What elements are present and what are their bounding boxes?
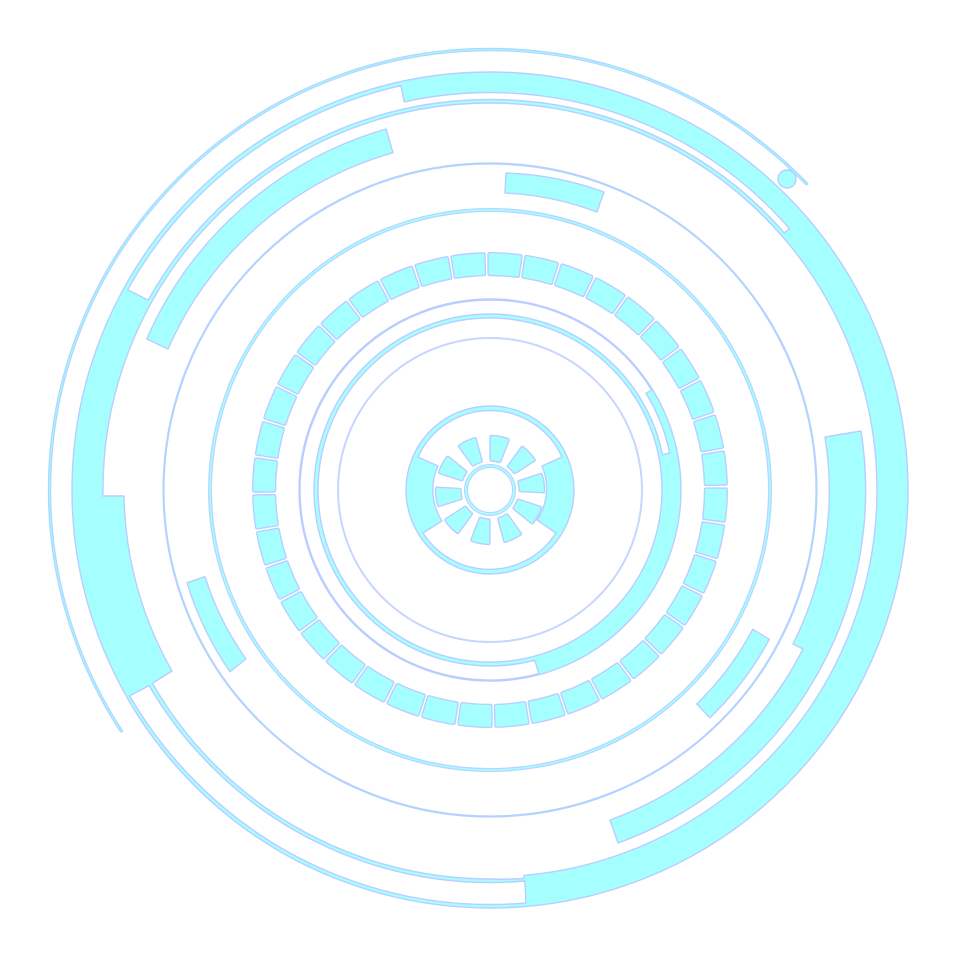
double ring radius 280: [210, 210, 770, 770]
hub segments: [432, 435, 548, 545]
outer thin arc: [50, 50, 806, 731]
thin innermost ring radius 152: [338, 338, 642, 642]
segmented tile ring: [251, 251, 729, 729]
inner ring band with slot: [299, 299, 681, 681]
arc band: lower left short: [187, 577, 246, 672]
thin ring radius 326: [164, 164, 816, 816]
arc band: upper left: [147, 129, 393, 349]
small circle on outer arc: [778, 170, 796, 188]
outer ring band with slots and step: [72, 72, 908, 908]
center double ring: [466, 466, 514, 514]
arc band: lower right short: [697, 629, 769, 718]
arc band: top short: [505, 173, 604, 212]
arc band: right large with notch: [610, 431, 866, 843]
central hub ring with side sectors: [406, 406, 574, 574]
